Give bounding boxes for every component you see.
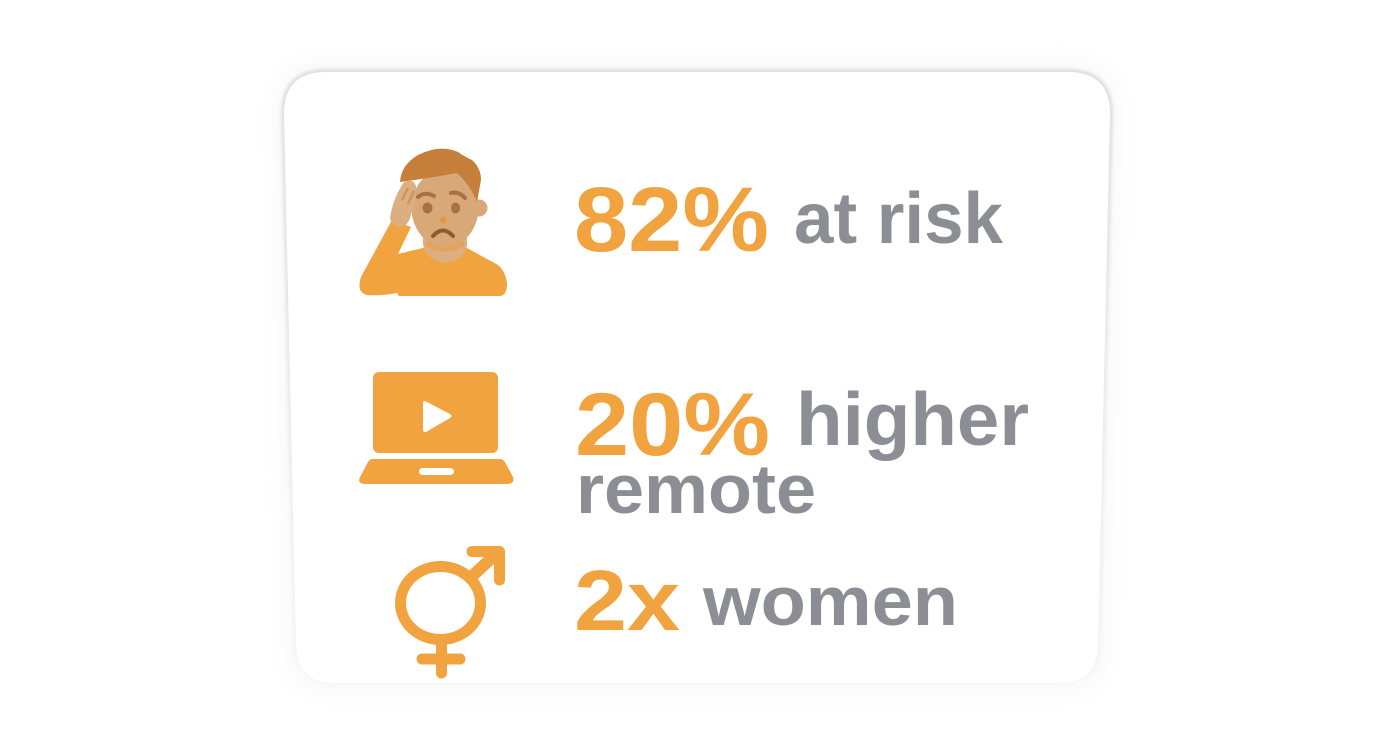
stat: 20% higher remote: higher [796,377,1029,461]
stat: 2x women: 2x [574,554,680,649]
stat: 20% higher remote [575,374,1029,528]
stat: 2x women [574,554,958,649]
stat: 82% at risk [574,169,1004,271]
stat: 2x women: women [702,562,958,640]
stat: 20% higher remote: 20% [575,374,770,474]
icon: worried person holding head [359,149,507,296]
stat: 82% at risk: at risk [794,179,1004,259]
stat: 20% higher remote: remote [576,450,816,528]
stat: 82% at risk: 82% [574,169,769,271]
icon: combined gender symbol [400,552,500,673]
icon: laptop with play button [359,372,513,484]
panel: card [278,64,1116,690]
